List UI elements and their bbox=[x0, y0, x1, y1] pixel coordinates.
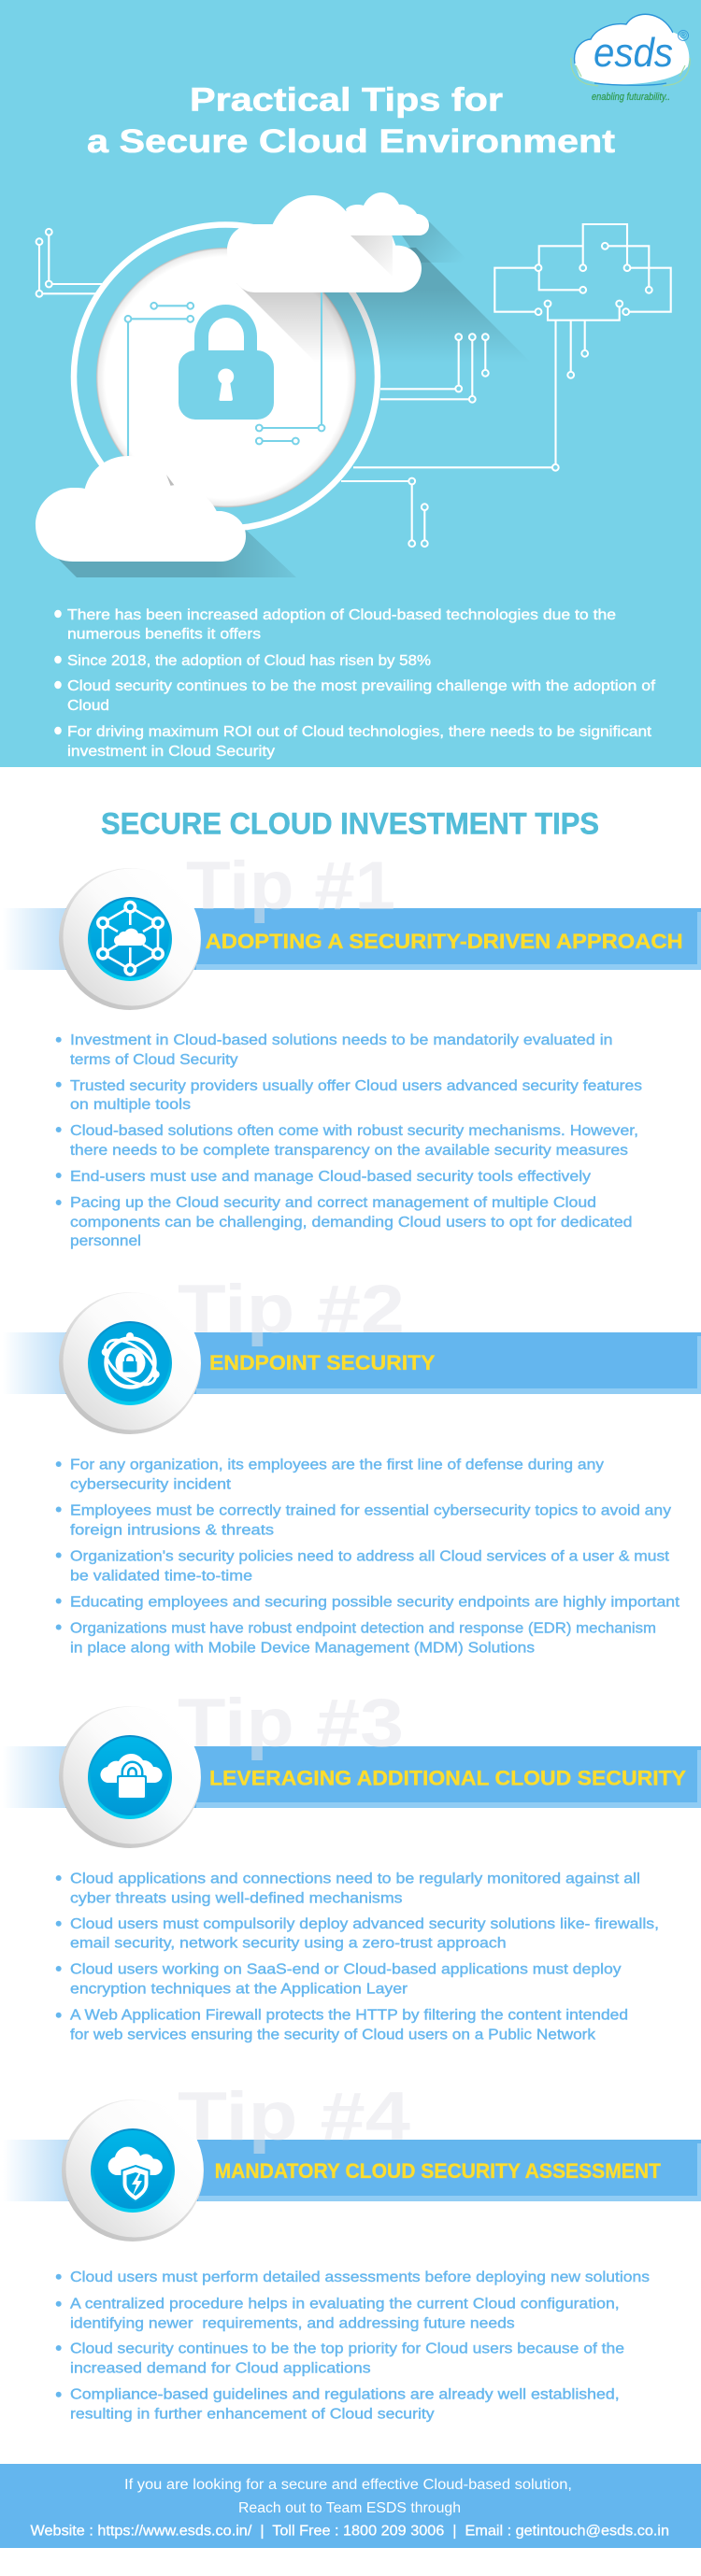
circuit lines outside bbox=[39, 224, 671, 544]
footer text bbox=[30, 2477, 669, 2540]
bullets bbox=[56, 1875, 62, 2018]
intro text: numerous benefits it offers bbox=[67, 626, 261, 643]
intro bullet list bbox=[54, 607, 656, 760]
heading: SECURE CLOUD INVESTMENT TIPS bbox=[101, 807, 599, 841]
tip 3 text: for web services ensuring the security of Cloud users on a Public Network bbox=[70, 2028, 596, 2043]
icon: cloud shield bbox=[108, 2147, 163, 2201]
bottom cloud bbox=[36, 456, 246, 562]
bullets bbox=[56, 1037, 62, 1205]
banner bbox=[3, 2140, 701, 2201]
title: a Secure Cloud Environment bbox=[87, 123, 615, 160]
logo: esds bbox=[594, 30, 673, 76]
tip 2 text: be validated time-to-time bbox=[70, 1568, 252, 1585]
intro text: For driving maximum ROI out of Cloud technologies, there needs to be significant bbox=[67, 724, 652, 740]
footer text: If you are looking for a secure and effective Cloud-based solution, bbox=[124, 2477, 572, 2493]
banner bbox=[3, 1332, 701, 1394]
tip 4 text: Cloud users must perform detailed assessments before deploying new solutions bbox=[70, 2270, 650, 2285]
big cloud bbox=[227, 195, 422, 292]
icon: endpoint lock bbox=[97, 1331, 164, 1393]
footer text: Reach out to Team ESDS through bbox=[238, 2500, 461, 2516]
tip 3 text: Cloud users working on SaaS-end or Cloud-based applications must deploy bbox=[70, 1962, 622, 1978]
intro text bbox=[67, 607, 656, 760]
tip 1 text: Cloud-based solutions often come with robust security mechanisms. However, bbox=[70, 1123, 638, 1139]
tip 1 text: Trusted security providers usually offer Cloud users advanced security features bbox=[70, 1078, 642, 1094]
logo bbox=[571, 14, 690, 103]
intro text: Cloud bbox=[67, 698, 109, 714]
tip 1 text: End-users must use and manage Cloud-based security tools effectively bbox=[70, 1169, 591, 1185]
tip 2 text: For any organization, its employees are the first line of defense during any bbox=[70, 1458, 604, 1473]
tip 4 text: resulting in further enhancement of Cloud security bbox=[70, 2407, 435, 2423]
tip 1 text: there needs to be complete transparency on the available security measures bbox=[70, 1143, 628, 1159]
tip 4 text: identifying newer requirements, and addressing future needs bbox=[70, 2316, 515, 2332]
tip 2 text: Employees must be correctly trained for essential cybersecurity topics to avoid any bbox=[70, 1502, 671, 1519]
tip 4 text: A centralized procedure helps in evaluating the current Cloud configuration, bbox=[70, 2297, 620, 2313]
panel: hero background bbox=[0, 0, 701, 767]
intro text: investment in Cloud Security bbox=[67, 744, 275, 760]
tip 3 text: email security, network security using a zero-trust approach bbox=[70, 1936, 507, 1952]
tip 2 text: foreign intrusions & threats bbox=[70, 1523, 274, 1538]
bullets bbox=[56, 1461, 62, 1630]
tip 1 text: Pacing up the Cloud security and correct management of multiple Cloud bbox=[70, 1195, 596, 1211]
tip 1 text: personnel bbox=[70, 1233, 141, 1249]
tip 1 text: Investment in Cloud-based solutions needs to be mandatorily evaluated in bbox=[70, 1032, 613, 1048]
banner bbox=[3, 1746, 701, 1808]
tip 4 text bbox=[70, 2270, 650, 2423]
badge bbox=[62, 2099, 204, 2242]
title bbox=[87, 82, 615, 160]
icon: padlock bbox=[179, 305, 274, 420]
intro text: There has been increased adoption of Cloud-based technologies due to the bbox=[67, 607, 616, 623]
panel: tip 2 bbox=[3, 1272, 701, 1656]
icon: cloud lock bbox=[100, 1754, 163, 1800]
banner title: ENDPOINT SECURITY bbox=[209, 1351, 436, 1374]
panel: footer bbox=[0, 2464, 701, 2548]
ghost label: Tip #3 bbox=[178, 1686, 404, 1761]
panel: tip 4 bbox=[3, 2079, 701, 2423]
tip 1 text: components can be challenging, demanding Cloud users to opt for dedicated bbox=[70, 1215, 632, 1231]
tip 4 text: Cloud security continues to be the top priority for Cloud users because of the bbox=[70, 2341, 624, 2357]
intro text: Cloud security continues to be the most prevailing challenge with the adoption of bbox=[67, 678, 656, 694]
tip 3 text: Cloud users must compulsorily deploy advanced security solutions like- firewalls, bbox=[70, 1916, 659, 1932]
tip 2 text: Organization's security policies need to address all Cloud services of a user & must bbox=[70, 1549, 670, 1564]
tip 3 text: cyber threats using well-defined mechanisms bbox=[70, 1891, 403, 1907]
circuit nodes outside bbox=[36, 229, 652, 547]
ring and disc bbox=[74, 224, 378, 529]
tip 2 text: Educating employees and securing possible security endpoints are highly important bbox=[70, 1594, 680, 1611]
tip 3 text: encryption techniques at the Application Layer bbox=[70, 1982, 408, 1998]
tip 2 text: Organizations must have robust endpoint detection and response (EDR) mechanism bbox=[70, 1620, 656, 1637]
badge bbox=[59, 1706, 201, 1848]
footer text: Website : https://www.esds.co.in/ | Toll Free : 1800 209 3006 | Email : getintouch@esds.co.in bbox=[30, 2524, 669, 2540]
small cloud bbox=[346, 192, 429, 235]
banner bbox=[3, 908, 701, 970]
panel: tip 1 bbox=[3, 848, 701, 1249]
tip 3 text bbox=[70, 1872, 659, 2043]
logo: ® bbox=[680, 31, 687, 41]
illustration: cloud security lock bbox=[36, 192, 671, 577]
tip 4 text: increased demand for Cloud applications bbox=[70, 2361, 371, 2377]
ghost label: Tip #1 bbox=[186, 848, 395, 924]
intro text: Since 2018, the adoption of Cloud has risen by 58% bbox=[67, 653, 431, 669]
title: Practical Tips for bbox=[190, 82, 503, 118]
bullets bbox=[54, 610, 62, 734]
circuit nodes inside disc bbox=[125, 303, 324, 444]
tip 2 text bbox=[70, 1458, 680, 1656]
panel: tip 3 bbox=[3, 1686, 701, 2043]
long cloud shadows bbox=[53, 221, 531, 577]
circuit lines inside disc bbox=[128, 292, 322, 458]
tip 4 text: Compliance-based guidelines and regulations are already well established, bbox=[70, 2387, 620, 2403]
tip 1 text: on multiple tools bbox=[70, 1097, 191, 1113]
badge bbox=[59, 1292, 201, 1434]
icon: cloud network bbox=[98, 903, 163, 975]
logo: enabling futurability.. bbox=[592, 92, 670, 103]
badge bbox=[59, 868, 201, 1010]
tip 1 text bbox=[70, 1032, 642, 1249]
ghost label: Tip #4 bbox=[178, 2079, 410, 2155]
banner title: LEVERAGING ADDITIONAL CLOUD SECURITY bbox=[209, 1767, 686, 1790]
tip 3 text: Cloud applications and connections need to be regularly monitored against all bbox=[70, 1872, 640, 1887]
tip 2 text: cybersecurity incident bbox=[70, 1476, 232, 1493]
tip 1 text: terms of Cloud Security bbox=[70, 1052, 238, 1068]
ghost label: Tip #2 bbox=[178, 1272, 405, 1347]
bullets bbox=[56, 2274, 62, 2398]
banner title: MANDATORY CLOUD SECURITY ASSESSMENT bbox=[215, 2159, 661, 2183]
banner title: ADOPTING A SECURITY-DRIVEN APPROACH bbox=[206, 930, 683, 953]
tip 2 text: in place along with Mobile Device Management (MDM) Solutions bbox=[70, 1641, 535, 1656]
tip 3 text: A Web Application Firewall protects the HTTP by filtering the content intended bbox=[70, 2008, 628, 2024]
